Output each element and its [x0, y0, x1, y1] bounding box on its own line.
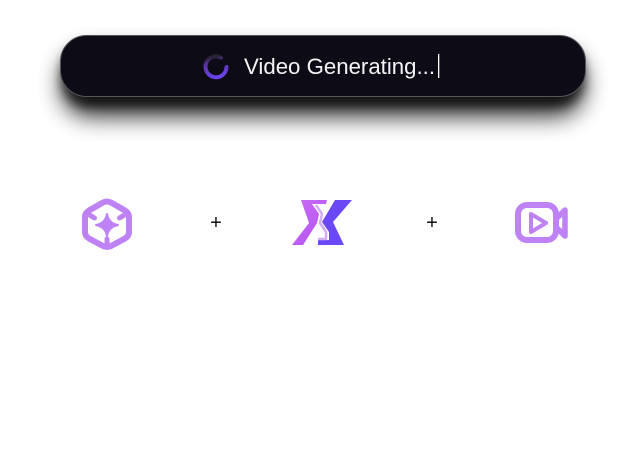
icon: hexagon box with sparkle	[85, 202, 129, 247]
icon: video camera	[518, 205, 565, 240]
text cursor	[438, 54, 439, 78]
status text: Video Generating...	[244, 54, 435, 79]
search bar panel	[60, 36, 586, 116]
icon: loading spinner	[206, 56, 226, 77]
icon: X logo	[292, 200, 352, 245]
plus sign right: +	[426, 212, 438, 234]
plus sign left: +	[210, 212, 222, 234]
